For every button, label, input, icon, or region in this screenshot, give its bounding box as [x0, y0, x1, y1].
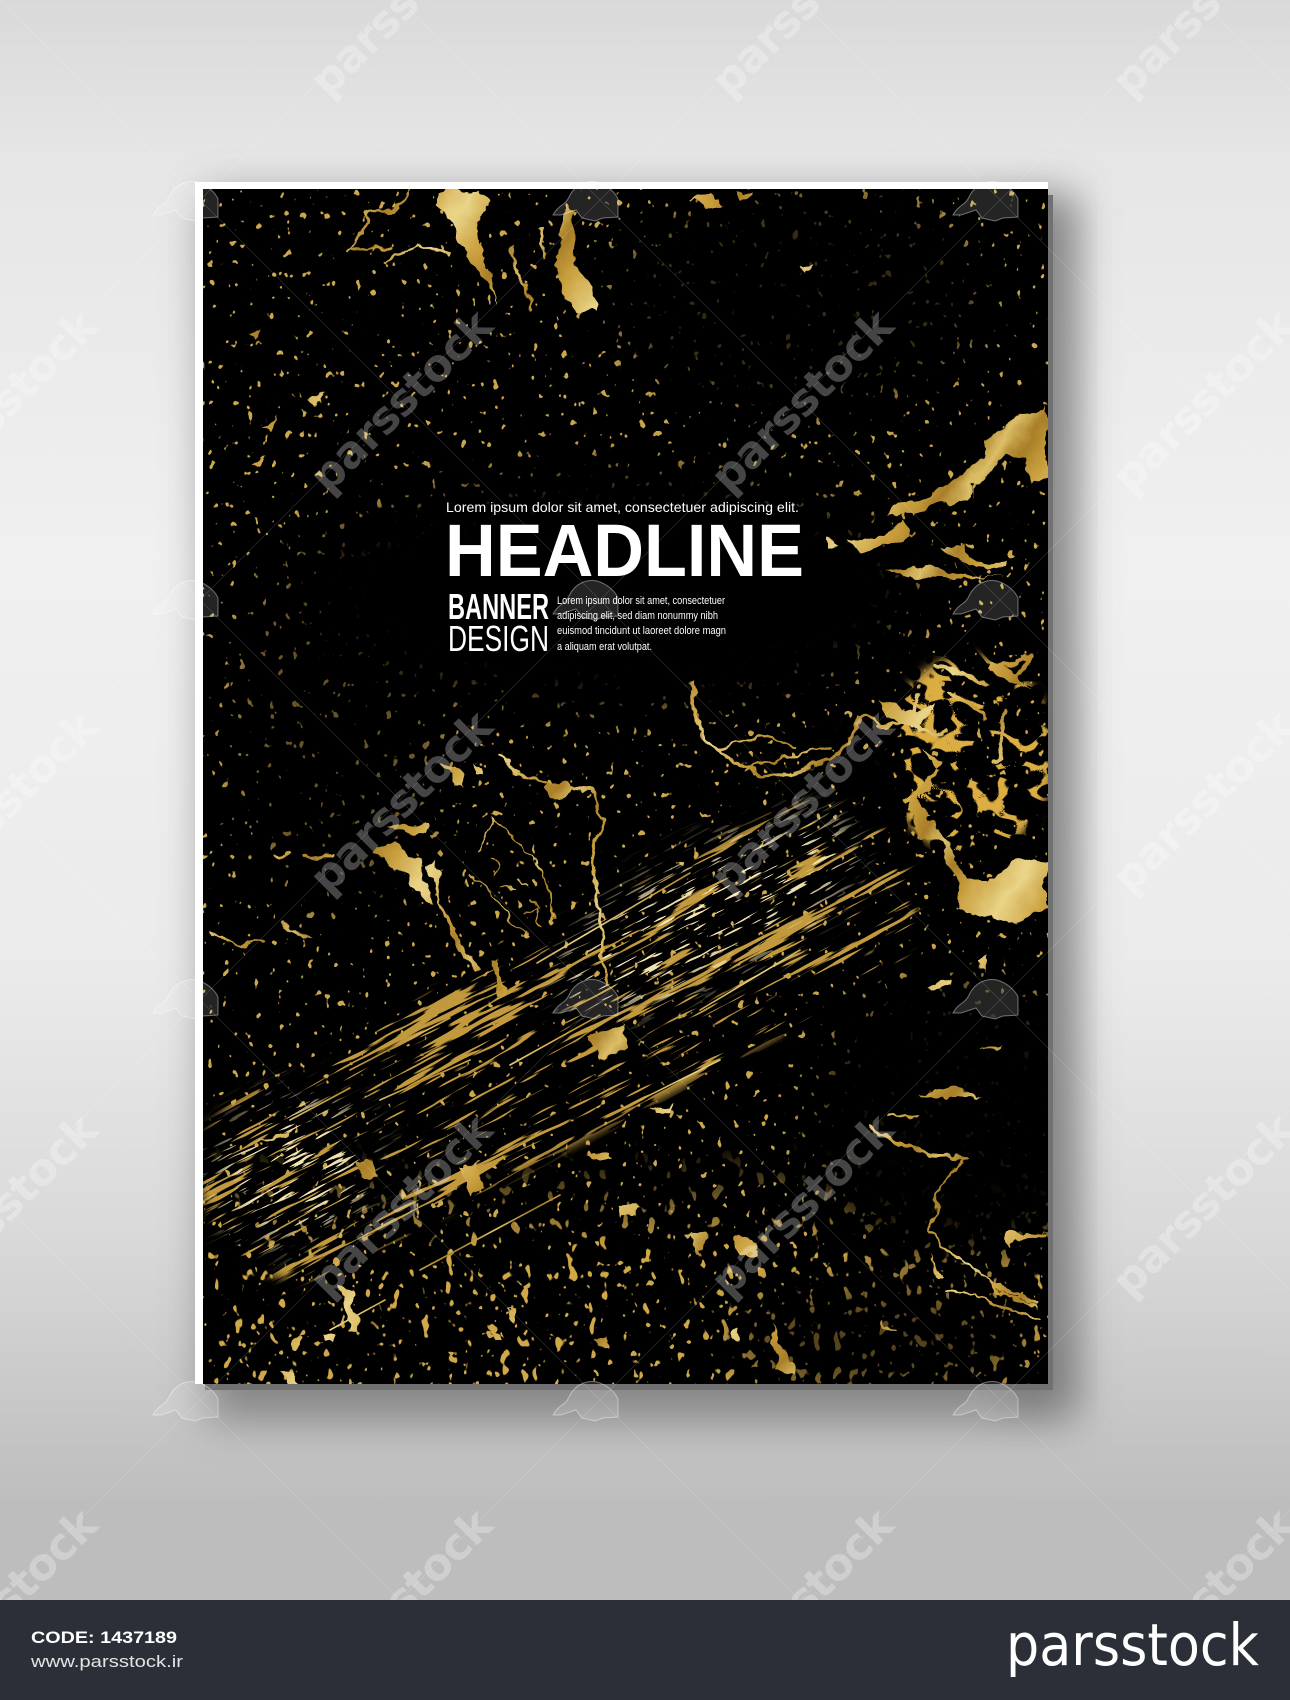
- gold foil strokes: [210, 190, 1037, 1330]
- gold foil fills: [248, 190, 1047, 1384]
- brush band long streaks: [290, 873, 800, 1330]
- banner label: BANNER: [448, 586, 549, 627]
- top drips: [437, 190, 500, 305]
- body paragraph: adipiscing elit, sed diam nonummy nibh: [557, 610, 718, 622]
- scattered blobs: [460, 1163, 484, 1198]
- footer code: CODE: 1437189: [31, 1628, 177, 1647]
- right top mass: [887, 405, 1047, 516]
- footer logo: parsstock: [1006, 1611, 1259, 1679]
- watermark text: parsstock: parsstock: [300, 1103, 504, 1307]
- body paragraph: Lorem ipsum dolor sit amet, consectetuer: [557, 595, 725, 607]
- body paragraph: a aliquam erat volutpat.: [557, 641, 652, 653]
- watermark text: parsstock: parsstock: [701, 1103, 905, 1307]
- watermark text: parsstock: parsstock: [701, 299, 905, 503]
- poster sheet edges: [195, 182, 1053, 1390]
- headline: HEADLINE: [445, 509, 804, 592]
- watermark text: parsstock: parsstock: [300, 700, 504, 904]
- marbled gold veins, right side: [877, 647, 1048, 863]
- design label: DESIGN: [448, 618, 549, 659]
- hand-placed gold foil, roughened edges: [210, 190, 1047, 1384]
- poster drop shadow: [205, 195, 1075, 1420]
- headline text block: [445, 499, 804, 659]
- tagline: Lorem ipsum dolor sit amet, consectetuer adipiscing elit.: [446, 499, 799, 515]
- poster: black marble with gold foil: [203, 189, 1048, 1384]
- footer url: www.parsstock.ir: [30, 1652, 183, 1671]
- watermark icons: elephant heads: [153, 182, 1018, 1421]
- denser speckle at the bottom: [203, 1140, 1048, 1390]
- footer bar: [0, 1600, 1290, 1700]
- body paragraph: [557, 595, 726, 653]
- mid drips: [373, 840, 432, 905]
- gold speckle texture: [203, 189, 1048, 1384]
- watermark text: parsstock: parsstock: [701, 1498, 905, 1700]
- watermark text: parsstock: parsstock: [300, 299, 504, 503]
- quiet dark zones of the marble: [230, 190, 1110, 1400]
- diagonal gold brush band: [203, 789, 925, 1288]
- watermark text: parsstock: parsstock: [300, 1498, 504, 1700]
- right large mass: [907, 748, 1047, 923]
- watermark text: parsstock: parsstock: [701, 700, 905, 904]
- body paragraph: euismod tincidunt ut laoreet dolore magn: [557, 625, 726, 637]
